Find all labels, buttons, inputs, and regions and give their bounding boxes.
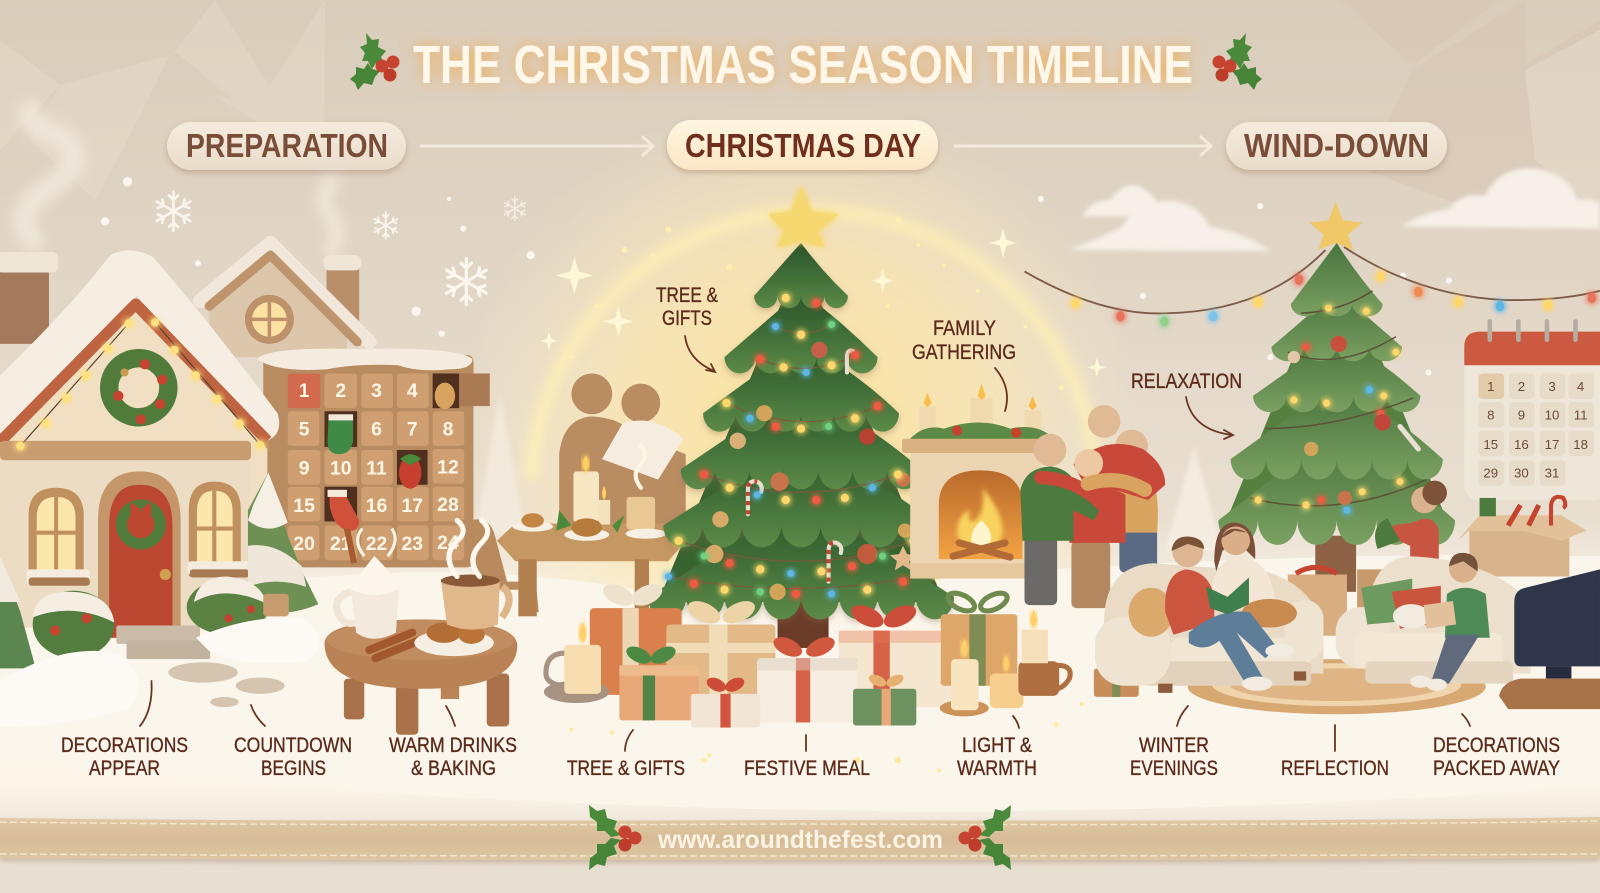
calendar numbers [293, 380, 459, 555]
footer holly right [958, 805, 1011, 870]
label: festive meal [744, 735, 870, 780]
stacked tree by calendar [248, 472, 318, 613]
window right [188, 482, 249, 578]
calendar numbers: 1 [299, 380, 310, 402]
flame [957, 488, 1002, 551]
label: tree and gifts [567, 730, 685, 780]
ornaments [1288, 336, 1418, 505]
upper callout: tree and gifts [656, 284, 718, 372]
short candle [990, 655, 1023, 708]
silhouette of family [559, 373, 686, 526]
label: winter evenings: EVENINGS [1130, 757, 1218, 780]
small gift beside sofa [1094, 659, 1139, 697]
wreath [109, 358, 168, 424]
centre right candle [940, 639, 989, 716]
date numbers: 30 [1514, 466, 1529, 481]
calendar numbers: 8 [443, 419, 454, 441]
calendar numbers: 2 [335, 380, 346, 402]
phase pill: preparation [167, 122, 406, 170]
sparkles over floor [569, 702, 1084, 772]
pillow [1129, 588, 1173, 637]
date numbers: 1 [1487, 379, 1494, 394]
round table with drinks [324, 520, 517, 735]
title: right holly [1212, 33, 1262, 90]
left sofa with couple [1095, 522, 1323, 693]
cushions [1361, 579, 1441, 629]
door [98, 471, 181, 638]
calendar numbers: 22 [366, 533, 387, 555]
label: decorations packed away: DECORATIONS [1433, 734, 1560, 757]
cream red gift [757, 633, 857, 722]
label: tree and gifts: TREE & GIFTS [567, 757, 685, 780]
wind-down christmas tree [1218, 202, 1455, 592]
tree body fill [658, 255, 944, 602]
falling snow [101, 177, 1452, 376]
calendar numbers: 4 [407, 380, 418, 402]
glow: radiant background around christmas tree [455, 95, 1145, 785]
calendar numbers: 5 [299, 419, 310, 441]
date numbers: 17 [1545, 437, 1559, 452]
title: THE CHRISTMAS SEASON TIMELINE [413, 35, 1193, 95]
calendar numbers: 24 [437, 532, 459, 554]
orange gift [590, 580, 682, 695]
ground snow [0, 555, 1600, 811]
main house [0, 250, 279, 659]
tv on stand [1499, 569, 1600, 709]
calendar numbers: 28 [437, 494, 459, 516]
stepping stones [168, 662, 285, 707]
child [1410, 553, 1490, 691]
calendar numbers: 11 [366, 457, 387, 479]
calendar numbers: 23 [401, 533, 423, 555]
tan green gift [941, 590, 1017, 686]
wall calendar [1464, 321, 1600, 500]
mantel candles [919, 384, 1041, 437]
tree tiers [648, 243, 954, 619]
house string lights [16, 318, 264, 450]
phase pill: christmas day [667, 120, 938, 170]
calendar numbers: 3 [371, 380, 382, 402]
label: warm drinks and baking: & BAKING [411, 757, 496, 780]
calendar numbers: 21 [330, 533, 352, 555]
calendar numbers: 16 [366, 495, 388, 517]
seat and base [1143, 638, 1311, 693]
mug candle [1018, 610, 1070, 696]
label: decorations appear [61, 681, 188, 780]
background geometric facets right [1340, 0, 1600, 220]
phase pill: wind-down: WIND-DOWN [1244, 127, 1429, 164]
label: countdown begins: BEGINS [261, 757, 326, 780]
upper callout: tree and gifts: TREE & [656, 284, 718, 307]
calendar numbers: 9 [299, 457, 310, 479]
sofa body [1367, 556, 1531, 673]
foot [1546, 666, 1571, 679]
label: light and warmth: WARMTH [957, 757, 1037, 780]
calendar numbers: 17 [401, 495, 423, 517]
arms [1095, 600, 1323, 686]
shoes [1242, 644, 1294, 691]
white mug [337, 529, 399, 639]
date numbers: 3 [1548, 379, 1556, 394]
legs [1024, 526, 1157, 608]
back house [200, 243, 369, 357]
phase pill: christmas day: CHRISTMAS DAY [685, 127, 921, 164]
label: light and warmth [957, 716, 1037, 780]
trunk [1315, 536, 1356, 592]
house wall [0, 298, 267, 622]
left person [1020, 434, 1100, 541]
small red ribbon gift [691, 675, 760, 728]
green small gift [853, 672, 916, 726]
beam [0, 441, 251, 460]
fireplace with candles [902, 384, 1055, 579]
footer ribbon [0, 817, 1600, 860]
label: countdown begins: COUNTDOWN [234, 734, 352, 757]
label: decorations appear: DECORATIONS [61, 734, 188, 757]
open doors with small gifts [324, 373, 490, 531]
arrow: christmas day to wind-down [955, 137, 1211, 155]
label: winter evenings [1130, 706, 1218, 780]
title: left holly [350, 33, 400, 90]
upper callout: family gathering: FAMILY [933, 317, 996, 340]
right bush [187, 577, 268, 635]
illustrated scene [0, 112, 1600, 811]
chimney [0, 252, 58, 344]
date numbers [1483, 379, 1588, 481]
date numbers: 29 [1483, 466, 1498, 481]
date numbers: 4 [1577, 379, 1584, 394]
gifts under central tree [590, 580, 1017, 728]
fireplace body [910, 442, 1041, 574]
label: festive meal: FESTIVE MEAL [744, 757, 870, 780]
binding rings [1490, 321, 1575, 340]
date numbers: 16 [1514, 437, 1529, 452]
label: warm drinks and baking [389, 706, 517, 780]
url: www.aroundthefest.com [657, 826, 943, 854]
hugging arms [1041, 478, 1145, 510]
date numbers: 11 [1574, 407, 1587, 422]
right person [1086, 430, 1158, 533]
date numbers: 2 [1518, 379, 1525, 394]
upper callout: tree and gifts: GIFTS [662, 307, 712, 330]
tan mug [441, 520, 509, 630]
table legs [344, 673, 509, 735]
logs [953, 543, 1010, 557]
glowing arc and sparkles [531, 211, 1106, 755]
person decorating tree [1375, 481, 1447, 571]
smoke from chimneys [24, 112, 337, 250]
ornaments [705, 342, 916, 600]
arrow: preparation to christmas day [421, 137, 653, 155]
upper callout: relaxation: RELAXATION [1131, 370, 1242, 393]
advent calendar [257, 349, 490, 567]
trunk [778, 602, 829, 648]
screen [1514, 569, 1600, 666]
small cream tree right [1165, 446, 1222, 551]
calendar numbers: 12 [437, 456, 459, 478]
sofa back [1104, 563, 1323, 673]
small gifts under wind-down tree [1288, 567, 1398, 636]
cookie plate [414, 622, 494, 656]
candle and tableware [512, 446, 666, 541]
garlands [1250, 291, 1427, 506]
calendar numbers: 6 [371, 419, 382, 441]
star [768, 186, 839, 247]
background geometric facets left [0, 0, 325, 200]
woman [1211, 522, 1297, 628]
middle person [1065, 449, 1126, 543]
label: decorations packed away [1433, 714, 1560, 780]
stand [1499, 679, 1600, 709]
date numbers: 10 [1545, 407, 1559, 422]
calendar numbers: 7 [407, 419, 418, 441]
far left tree [0, 556, 36, 668]
snow-covered small trees and bushes [0, 472, 318, 668]
date numbers: 31 [1545, 466, 1559, 481]
right sofa with child [1336, 553, 1531, 691]
rug [1188, 659, 1486, 714]
date numbers: 18 [1573, 437, 1588, 452]
label: reflection [1281, 725, 1389, 780]
book [1206, 578, 1249, 614]
tree body fill [1227, 250, 1447, 520]
label: light and warmth: LIGHT & [962, 734, 1032, 757]
phase pill: preparation: PREPARATION [186, 127, 388, 164]
snow mounds [0, 618, 319, 727]
tiers [1218, 243, 1455, 545]
calendar numbers: 20 [293, 533, 315, 555]
calendar numbers: 10 [330, 457, 352, 479]
tree lights [665, 294, 938, 598]
packing box with decorations [1457, 497, 1587, 577]
garlands [668, 322, 934, 589]
label: decorations packed away: PACKED AWAY [1433, 757, 1560, 780]
dining table with chair [469, 446, 686, 616]
label: warm drinks and baking: WARM DRINKS [389, 734, 517, 757]
label: winter evenings: WINTER [1139, 734, 1209, 757]
roof trim [0, 304, 267, 442]
date numbers: 8 [1487, 407, 1494, 422]
date cells [1479, 373, 1594, 486]
snowflakes [157, 192, 525, 305]
upper callout: family gathering: GATHERING [912, 341, 1016, 364]
hugging family [1020, 405, 1165, 608]
upper callout: family gathering [912, 317, 1016, 411]
tan gift [666, 597, 776, 708]
roof snow [0, 250, 279, 441]
lights [1255, 305, 1422, 514]
back person [1073, 405, 1165, 500]
date numbers: 15 [1483, 437, 1498, 452]
steps [116, 626, 210, 659]
footer holly left [589, 805, 642, 870]
table top [324, 620, 517, 689]
calendar door tiles [288, 373, 464, 560]
left candle [544, 622, 609, 703]
left bush [33, 591, 114, 658]
cream gift large [839, 601, 951, 707]
string lights [1024, 247, 1600, 327]
clouds [1069, 168, 1600, 251]
date numbers: 9 [1518, 407, 1525, 422]
label: decorations appear: APPEAR [89, 757, 160, 780]
candles around gifts [544, 610, 1070, 716]
label: countdown begins [234, 705, 352, 780]
peach green gift [619, 643, 699, 720]
star [1309, 202, 1362, 250]
calendar numbers: 15 [293, 495, 315, 517]
man [1165, 537, 1214, 635]
central christmas tree [648, 186, 954, 648]
upper callout: relaxation [1131, 370, 1242, 439]
garland [908, 422, 1055, 441]
small cream tree left of glow [474, 393, 526, 536]
cinnamon sticks [369, 633, 418, 658]
jeans [1189, 611, 1278, 686]
window left [27, 488, 90, 586]
label: reflection: REFLECTION [1281, 757, 1389, 780]
